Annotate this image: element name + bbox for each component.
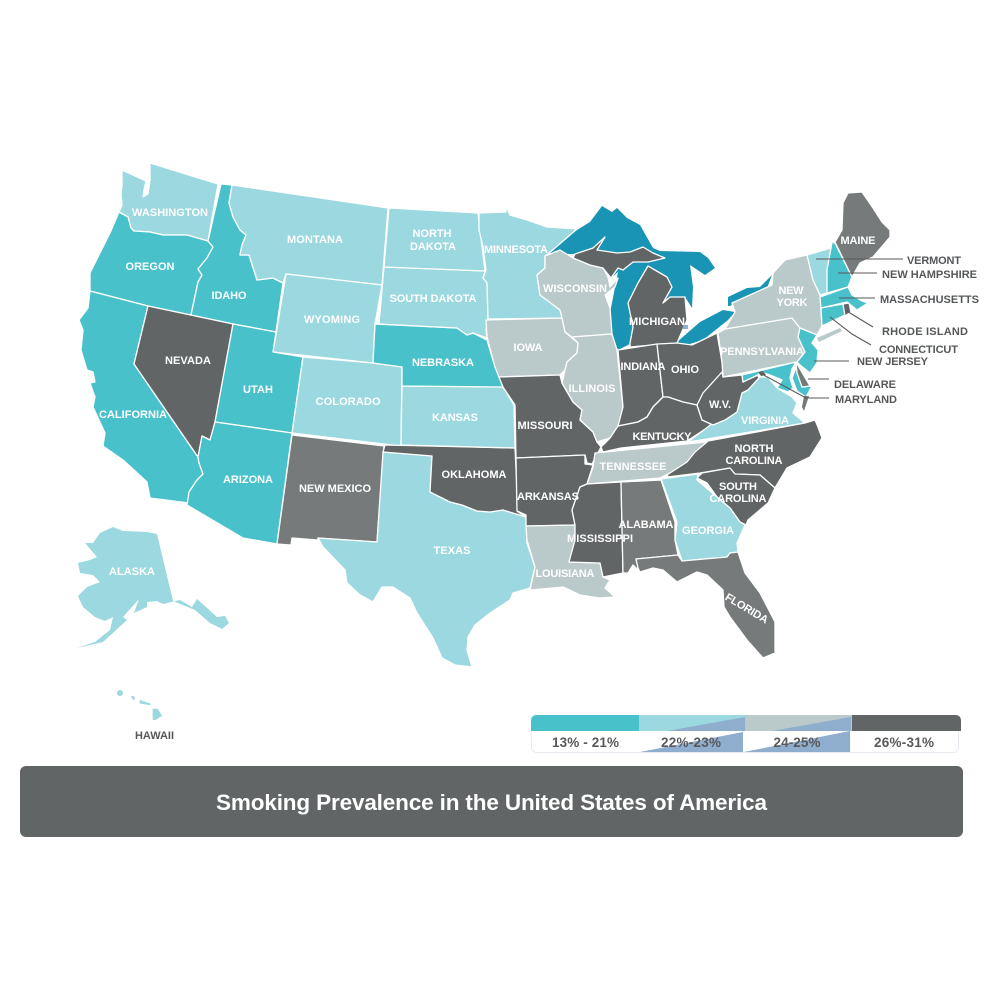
label: South Carolina: CAROLINA [710, 493, 767, 505]
state: Minnesota [479, 206, 577, 319]
label: Oklahoma: OKLAHOMA [442, 469, 507, 481]
state: Pennsylvania [718, 318, 805, 377]
legend swatch: 24-25% [745, 715, 852, 731]
state: Connecticut [821, 304, 845, 326]
state: Vermont [807, 248, 831, 295]
state: Louisiana [526, 525, 615, 598]
label: Minnesota: MINNESOTA [484, 244, 548, 256]
label: Pennsylvania: PENNSYLVANIA [720, 346, 804, 358]
state: Alaska [77, 527, 229, 648]
label: Colorado: COLORADO [316, 396, 381, 408]
label: North Dakota: NORTH [412, 228, 452, 240]
label: North Dakota: DAKOTA [410, 241, 456, 253]
state: Delaware [796, 362, 810, 387]
label: South Carolina: SOUTH [719, 481, 757, 493]
legend label: 22%-23%: 22%-23% [661, 735, 721, 750]
state: Utah [215, 324, 303, 433]
state: Nebraska [373, 324, 503, 387]
state: Arkansas [516, 455, 593, 526]
state: Maryland west [742, 362, 796, 392]
state: West Virginia [697, 372, 759, 425]
state: Indiana [618, 344, 663, 426]
state: Kansas [401, 386, 515, 448]
state: Illinois [562, 334, 623, 442]
legend shadow: 24-25% swatch [772, 717, 851, 731]
state: Texas [318, 452, 535, 667]
callout: Maryland: MARYLAND [835, 394, 897, 406]
state: Washington [119, 163, 218, 241]
callout: Massachusetts: MASSACHUSETTS [880, 294, 979, 306]
legend label box [532, 725, 958, 752]
legend label: 26%-31%: 26%-31% [874, 735, 934, 750]
state: Arizona [187, 422, 292, 544]
callout: Delaware: DELAWARE [834, 379, 896, 391]
label: North Carolina: CAROLINA [726, 455, 783, 467]
label: Texas: TEXAS [434, 545, 470, 557]
label: Maine: MAINE [840, 235, 876, 247]
state: Michigan lower peninsula [628, 266, 687, 347]
state: Maryland eastern shore [792, 365, 812, 397]
title: Smoking Prevalence in the United States of America [216, 790, 767, 815]
label: Utah: UTAH [243, 384, 273, 396]
state: Virginia eastern shore [802, 396, 809, 411]
state: Florida [636, 552, 775, 658]
label: Nebraska: NEBRASKA [412, 357, 474, 369]
icon: Lake St. Clair [683, 325, 688, 329]
lake: Ontario [728, 275, 772, 306]
label: Alaska: ALASKA [109, 566, 155, 578]
label: Kansas: KANSAS [432, 412, 478, 424]
state: New Hampshire [827, 242, 852, 293]
state: North Carolina [667, 420, 822, 488]
callout: Rhode Island [845, 310, 968, 338]
label: New York: YORK [776, 297, 808, 309]
callout: New Jersey: NEW JERSEY [857, 356, 929, 368]
state: Hawaii [117, 690, 163, 721]
label: Oregon: OREGON [126, 261, 175, 273]
state: Mississippi [569, 482, 623, 577]
label: California: CALIFORNIA [99, 409, 167, 421]
label: Missouri: MISSOURI [518, 420, 572, 432]
state: New York, Long Island [817, 328, 842, 342]
state: Oregon [90, 212, 213, 315]
label: Arkansas: ARKANSAS [517, 491, 579, 503]
label: Ohio: OHIO [671, 364, 699, 376]
callout: Maryland [760, 373, 897, 406]
label: New Mexico: NEW MEXICO [299, 483, 371, 495]
label: Wyoming: WYOMING [304, 314, 360, 326]
legend shadow: 24-25% label [744, 731, 850, 752]
state: California [79, 291, 203, 503]
state: Ohio [657, 333, 723, 405]
state: South Carolina [697, 468, 775, 525]
state: Idaho [191, 184, 283, 332]
state: Colorado [292, 357, 402, 446]
legend label: 13% - 21%: 13% - 21% [552, 735, 619, 750]
label: Louisiana: LOUISIANA [536, 568, 595, 580]
label: Illinois: ILLINOIS [568, 383, 616, 395]
label: Florida: FLORIDA [723, 591, 770, 626]
label: Nevada: NEVADA [165, 355, 211, 367]
label: Alabama: ALABAMA [618, 519, 674, 531]
state: Iowa [486, 318, 578, 377]
callout: Rhode Island: RHODE ISLAND [882, 326, 968, 338]
state: District of Columbia [758, 371, 766, 376]
state: New Mexico [277, 435, 384, 545]
label: Hawaii: HAWAII [135, 730, 174, 742]
legend label: 24-25%: 24-25% [774, 735, 820, 750]
label: Georgia: GEORGIA [682, 525, 734, 537]
state: Michigan upper peninsula [573, 237, 665, 278]
lakes: Superior, Michigan, Huron [548, 206, 715, 350]
label: Iowa: IOWA [514, 342, 543, 354]
label: Idaho: IDAHO [212, 290, 247, 302]
label: South Dakota: SOUTH DAKOTA [390, 293, 477, 305]
legend swatch: 13%-21% [531, 715, 639, 731]
lake: Erie [677, 310, 735, 346]
legend shadow: 22%-23% swatch [667, 717, 745, 731]
callout: Connecticut: CONNECTICUT [879, 344, 958, 356]
label: Virginia: VIRGINIA [741, 415, 789, 427]
state: Kentucky [601, 397, 713, 452]
callout: New Hampshire [838, 269, 977, 281]
state: Massachusetts [820, 287, 868, 310]
label: New York: NEW [778, 285, 804, 297]
state: North Dakota [384, 208, 485, 271]
state: Missouri [499, 375, 601, 464]
label: West Virginia: W.V. [709, 399, 731, 411]
state name labels [99, 207, 876, 626]
label: North Carolina: NORTH [734, 443, 774, 455]
state: Virginia [688, 377, 805, 442]
label: Mississippi: MISSISSIPPI [567, 533, 633, 545]
legend swatch: 26%-31% [852, 715, 961, 731]
state: Nevada [134, 306, 233, 457]
legend swatch: 22%-23% [639, 715, 745, 731]
callout: New Jersey [814, 356, 929, 368]
label: Indiana: INDIANA [620, 361, 666, 373]
label: Tennessee: TENNESSEE [600, 461, 666, 473]
title banner [20, 766, 963, 837]
label: Montana: MONTANA [287, 234, 343, 246]
callout: Connecticut [830, 317, 958, 356]
callout: Vermont: VERMONT [907, 255, 961, 267]
state: South Dakota [379, 267, 488, 338]
label: Michigan: MICHIGAN [629, 316, 685, 328]
state: Oklahoma [383, 445, 526, 517]
state: Georgia [661, 474, 745, 561]
state: Alabama [621, 480, 678, 573]
state: New York [725, 255, 822, 335]
state: New Jersey [797, 328, 818, 373]
state: Wisconsin [537, 250, 618, 337]
state: Wyoming [273, 274, 382, 363]
state: Tennessee [587, 442, 707, 484]
label: Kentucky: KENTUCKY [632, 431, 692, 443]
label: Arizona: ARIZONA [223, 474, 273, 486]
label: Washington: WASHINGTON [132, 207, 208, 219]
callout: New Hampshire: NEW HAMPSHIRE [882, 269, 977, 281]
state: Maine [835, 192, 890, 277]
state: Montana [229, 185, 388, 285]
legend [531, 715, 961, 752]
map of the United States [77, 163, 890, 721]
state: Rhode Island [843, 303, 851, 316]
legend shadow: 22%-23% label [640, 732, 743, 752]
label: Wisconsin: WISCONSIN [543, 283, 607, 295]
